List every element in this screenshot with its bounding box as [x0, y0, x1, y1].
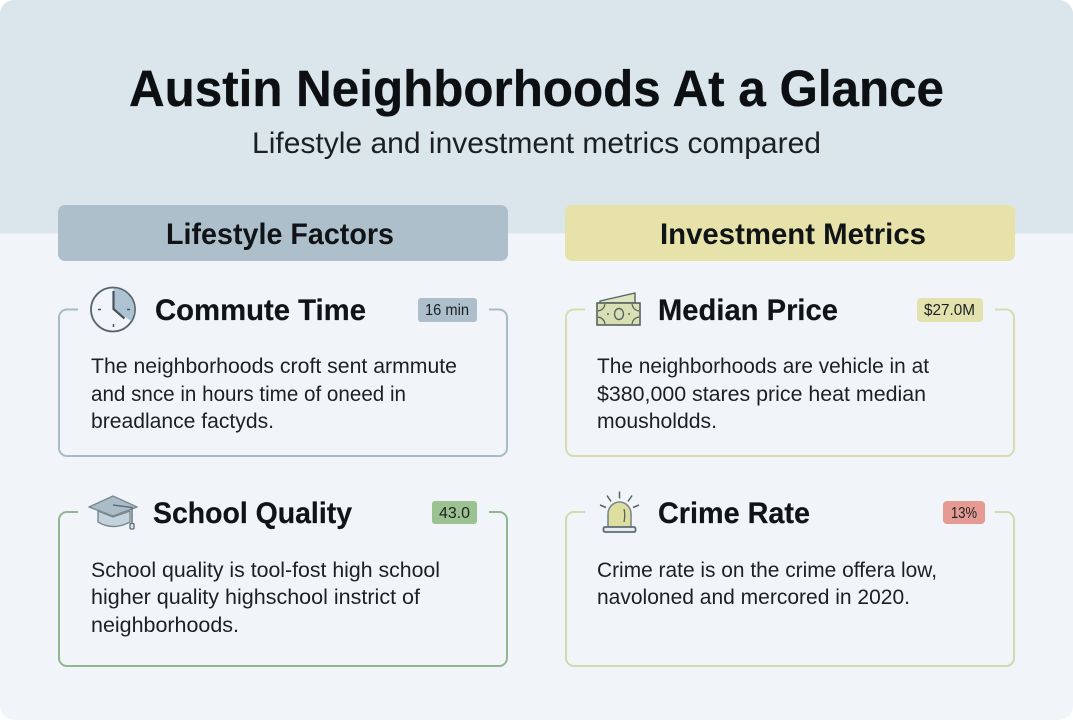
text: crime description: Crime rate is on the crime offera low,: [597, 559, 937, 582]
text: commute description: The neighborhoods croft sent armmute: [91, 355, 457, 378]
badge: 16 min: [418, 298, 477, 322]
icon: money: [597, 293, 640, 325]
panel: Crime Rate: [566, 492, 1014, 666]
text: commute description: [91, 355, 457, 433]
badge: 13%: [943, 501, 985, 524]
section header: Lifestyle Factors: [58, 205, 508, 261]
text: price description: mousholdds.: [597, 410, 717, 433]
text: price description: $380,000 stares price heat median: [597, 383, 926, 406]
text: commute description: and snce in hours time of oneed in: [91, 383, 406, 406]
badge: 43.0: 43.0: [439, 505, 470, 522]
badge: 43.0: [432, 501, 477, 524]
icon: graduation cap: [89, 496, 137, 529]
panel: Median Price: [566, 293, 1014, 456]
text: school description: School quality is tool-fost high school: [91, 559, 440, 582]
panel: School Quality: [59, 496, 507, 666]
text: school description: higher quality highschool instrict of: [91, 586, 420, 609]
badge: 16 min: 16 min: [425, 302, 469, 319]
heading: Commute Time: Commute Time: [155, 294, 366, 327]
heading: Crime Rate: Crime Rate: [658, 497, 810, 530]
text: school description: [91, 559, 440, 637]
text: price description: [597, 355, 929, 433]
section header: Lifestyle Factors: Lifestyle Factors: [166, 218, 394, 251]
panel: Commute Time: [59, 288, 507, 456]
icon: clock: [91, 288, 135, 332]
heading: School Quality: School Quality: [153, 497, 352, 530]
text: crime description: [597, 559, 937, 609]
icon: alarm light: [600, 492, 639, 532]
text: commute description: breadlance factyds.: [91, 410, 274, 433]
badge: $27.0M: $27.0M: [924, 302, 975, 319]
section header: Investment Metrics: [565, 205, 1015, 261]
text: price description: The neighborhoods are vehicle in at: [597, 355, 929, 378]
badge: $27.0M: [917, 298, 983, 322]
section header: Investment Metrics: Investment Metrics: [660, 218, 926, 251]
text: crime description: navoloned and mercored in 2020.: [597, 586, 910, 609]
badge: 13%: 13%: [951, 505, 977, 522]
title: Austin Neighborhoods At a Glance: [129, 60, 944, 117]
heading: Median Price: Median Price: [658, 294, 838, 327]
subtitle: Lifestyle and investment metrics compared: [252, 127, 821, 160]
text: school description: neighborhoods.: [91, 614, 239, 637]
